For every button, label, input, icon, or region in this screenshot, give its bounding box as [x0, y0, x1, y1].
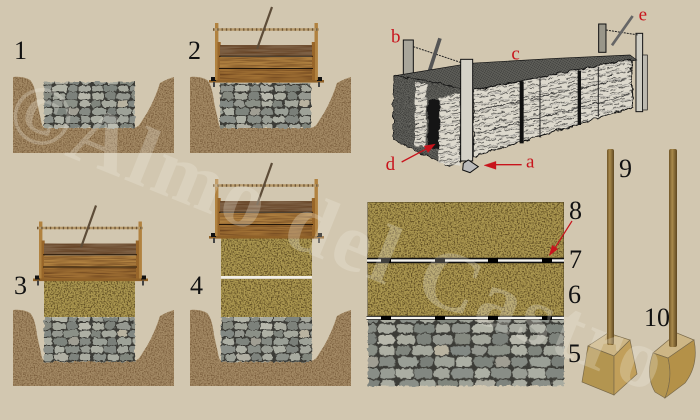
label 4: 4 [190, 271, 203, 300]
label 3: 3 [14, 271, 27, 300]
panel 2: formwork on foundation [188, 7, 351, 153]
mortar lines and beam holes [366, 258, 564, 320]
label 10: 10 [644, 303, 670, 332]
rammer 10 [644, 149, 695, 398]
sketch letters [386, 5, 647, 175]
long side planks [473, 59, 633, 157]
left end face [393, 76, 467, 167]
rammer 9 [582, 149, 637, 395]
label 1: 1 [14, 36, 27, 65]
top face [393, 55, 637, 90]
arrow to beam hole [549, 221, 572, 256]
label 2: 2 [188, 36, 201, 65]
panel 4: two rammed earth layers [190, 163, 351, 386]
sketch of formwork box [386, 5, 647, 175]
sketch letters: c [511, 43, 520, 64]
front post [461, 59, 473, 161]
watermark: ©Almo del Castro [0, 61, 679, 410]
section numbers: 8 [569, 196, 582, 225]
section numbers [568, 196, 582, 368]
rammed earth layers [368, 202, 564, 316]
panel 1: foundation in trench [13, 36, 174, 153]
stone foundation [368, 319, 564, 386]
sketch letters: a [526, 152, 535, 173]
sketch letters: d [386, 154, 396, 175]
sketch letters: e [639, 5, 647, 26]
sketch arrows [402, 144, 522, 169]
section numbers: 7 [569, 245, 582, 274]
back posts and ties [403, 16, 643, 112]
section numbers: 5 [568, 339, 581, 368]
panel: wall section detail [366, 196, 582, 386]
section numbers: 6 [568, 280, 581, 309]
label 9: 9 [619, 154, 632, 183]
panel 3: first rammed earth layer [13, 206, 174, 386]
sketch letters: b [391, 27, 400, 48]
